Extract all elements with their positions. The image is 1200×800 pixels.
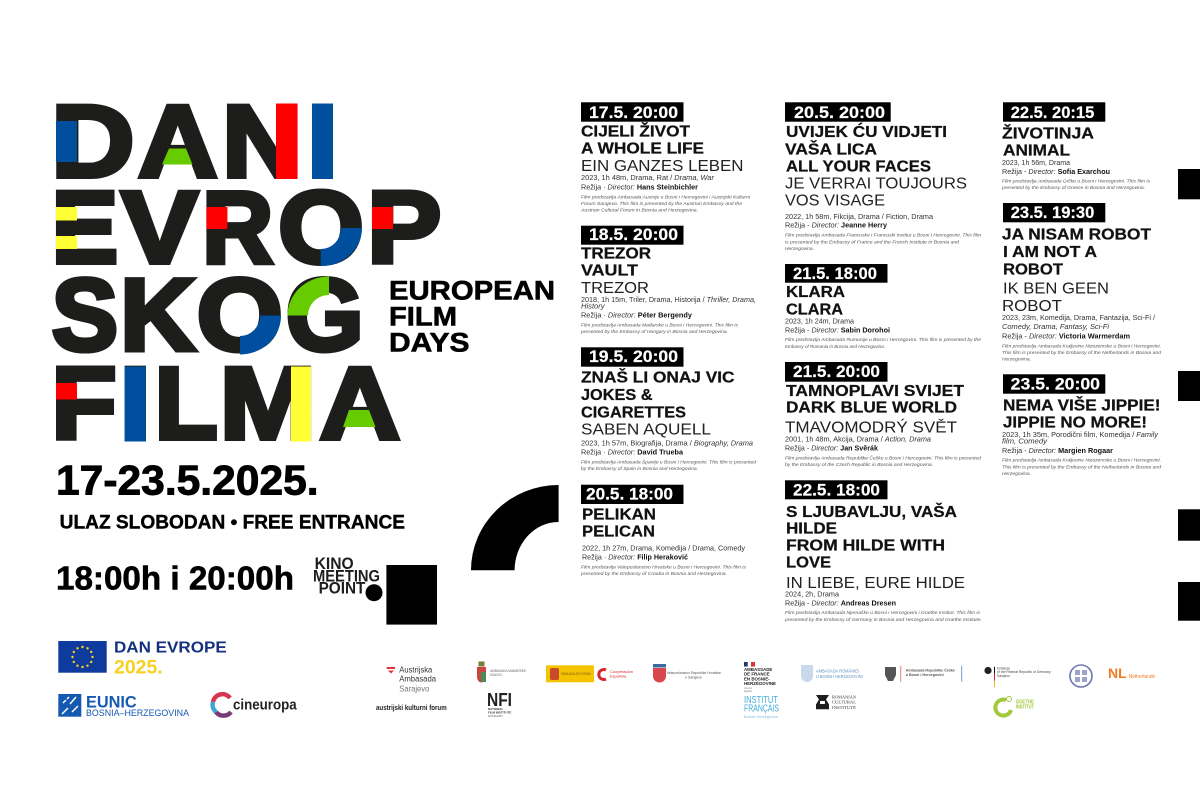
panel: film 23.5. Nema više Jippie: 23.5. 20:00	[1011, 374, 1100, 393]
panel: film 19.5. Znaš li onaj vic: CIGARETTES	[581, 404, 686, 421]
logo: Embassy of Romania: U BOSNI I HERCEGOVINI	[816, 674, 863, 679]
panel: film 17.5. Cijeli život: Forum Sarajevo. This film is presented by the Austrian Embassy and the	[581, 201, 742, 207]
panel: film 17.5. Cijeli život: Režija · Director: Hans Steinbichler	[581, 182, 698, 191]
panel: film 20.5. Pelikan: 2022, 1h 27m, Drama, Komedija / Drama, Comedy	[582, 544, 745, 553]
panel: film 23.5. Ja nisam robot: Comedy, Drama, Fantasy, Sci-Fi	[1002, 322, 1109, 331]
panel: film 21.5. Tamnoplavi svijet: Film predstavlja Ambasada Republike Češke u Bosni i Hercegovini. This film is presented	[785, 455, 981, 462]
panel: film 20.5. Pelikan: 20.5. 18:00	[586, 484, 673, 503]
panel: film 22.5. S ljubavlju, vaša Hilde: HILDE	[786, 521, 837, 538]
panel: film 20.5. Uvijek ću vidjeti vaša lica: Film predstavlja Ambasada Francuske i Francuski Institut u Bosni i Hercegovini. This film	[785, 233, 981, 239]
panel: film 19.5. Znaš li onaj vic: SABEN AQUELL	[581, 422, 711, 439]
logo: Cineuropa: cineuropa	[233, 696, 297, 713]
panel: film 22.5. S ljubavlju, vaša Hilde: FROM HILDE WITH	[786, 538, 945, 555]
logo: Embassy of Croatia: u Sarajevu	[685, 674, 702, 680]
panel: film 19.5. Znaš li onaj vic: JOKES &	[581, 387, 652, 404]
panel: film 22.5. Životinja: Režija - Director: Sofia Exarchou	[1002, 167, 1110, 176]
panel: film 22.5. S ljubavlju, vaša Hilde: 22.5. 18:00	[793, 480, 880, 499]
panel: film 18.5. Trezor: Režija · Director: Péter Bergendy	[581, 311, 693, 320]
panel: film 23.5. Nema više Jippie: JIPPIE NO MORE!	[1003, 415, 1147, 432]
logo: Embassy of Hungary: AMBASADA MAĐARSKE	[490, 669, 527, 673]
panel: film 18.5. Trezor: presented by the Embassy of Hungary in Bosnia and Herzegovina.	[580, 329, 728, 335]
panel: film 23.5. Nema više Jippie: Režija - Director: Margien Rogaar	[1002, 446, 1113, 455]
title: Dani evropskog filma: N	[222, 85, 302, 198]
decorative black quarter arc	[471, 485, 559, 570]
film strip squares on right edge	[1178, 169, 1200, 621]
panel: film 22.5. S ljubavlju, vaša Hilde	[784, 480, 982, 623]
logo: Embassy of Romania: AMBASADA ROMÂNIEI	[816, 669, 859, 674]
panel: film 23.5. Ja nisam robot: Film predstavlja Ambasada Kraljevine Nizozemske u Bosni i Hercegovini.	[1002, 343, 1161, 349]
panel: film 23.5. Nema više Jippie: NEMA VIŠE JIPPIE!	[1003, 397, 1160, 415]
title: Dani evropskog filma: K	[120, 258, 196, 372]
subtitle: European Film Days: DAYS	[389, 328, 470, 358]
panel: film 20.5. Uvijek ću vidjeti vaša lica: 2022, 1h 58m, Fikcija, Drama / Fiction, Drama	[785, 212, 934, 221]
panel: film 23.5. Ja nisam robot: This film is presented by the Embassy of the Netherlands in Bosnia and	[1002, 350, 1161, 356]
panel: film 22.5. S ljubavlju, vaša Hilde: LOVE	[786, 555, 831, 572]
panel: film 23.5. Ja nisam robot	[1002, 203, 1161, 363]
panel: film 21.5. Klara	[785, 264, 981, 350]
logo: Cooperación Española: Cooperación	[610, 669, 633, 674]
logo: Embassy of Croatia: Veleposlanstvo Republike Hrvatske	[667, 670, 722, 675]
panel: film 23.5. Nema više Jippie: This film is presented by the Embassy of the Netherlands in Bosnia and	[1002, 464, 1161, 470]
title: Dani evropskog filma	[51, 85, 441, 461]
title: Dani evropskog filma: G	[286, 259, 364, 372]
logo: Cooperación Española	[599, 669, 633, 680]
logo: National Film Institute Hungary: FILM INSTITUTE	[488, 710, 511, 714]
logo: Embassy of France: Égalité	[744, 688, 752, 693]
logo: Embassy of France: DE FRANCE	[744, 672, 770, 677]
free entrance notice: ULAZ SLOBODAN • FREE ENTRANCE	[60, 513, 405, 534]
panel: film 23.5. Ja nisam robot: Režija - Director: Victoria Warmerdam	[1002, 331, 1130, 340]
panel: film 17.5. Cijeli život: Film predstavlja Ambasada Austrije u Bosni i Hercegovini i Austrijski Kulturni	[581, 194, 751, 200]
title: Dani evropskog filma: R	[202, 171, 273, 285]
decorative black square	[386, 565, 437, 625]
festival dates: 17-23.5.2025.	[56, 457, 319, 504]
panel: film 23.5. Ja nisam robot: ROBOT	[1003, 261, 1064, 278]
logo: Embassy of Germany	[984, 666, 1051, 687]
panel: film 23.5. Ja nisam robot: JA NISAM ROBOT	[1002, 227, 1152, 244]
logo: Austrian Embassy Sarajevo	[387, 666, 437, 693]
panel: film 23.5. Ja nisam robot: 23.5. 19:30	[1011, 203, 1094, 222]
logo: National Film Institute Hungary: NFI	[487, 690, 512, 710]
panel: film 20.5. Uvijek ću vidjeti vaša lica: ALL YOUR FACES	[786, 158, 931, 175]
panel: film 20.5. Uvijek ću vidjeti vaša lica: VOS VISAGE	[785, 193, 885, 210]
logo: Embassy of Germany: Embassy	[997, 666, 1010, 670]
logo: Romanian Cultural Institute: INSTITUTE	[832, 705, 856, 710]
panel: film 17.5. Cijeli život: Austrian Cultural Forum in Bosnia and Herzegovina.	[580, 208, 698, 214]
panel: film 20.5. Uvijek ću vidjeti vaša lica: 20.5. 20:00	[794, 103, 885, 122]
logo: Embassy of France: Liberté	[744, 686, 752, 690]
panel: film 18.5. Trezor: 2018, 1h 15m, Triler, Drama, Historija / Thriller, Drama,	[581, 295, 756, 304]
logo: Embassy of the Czech Republic	[885, 666, 962, 682]
panel: film 18.5. Trezor: TREZOR	[581, 280, 649, 297]
panel: film 23.5. Ja nisam robot: ROBOT	[1002, 298, 1063, 315]
panel: film 21.5. Klara: Režija - Director: Sabin Dorohoi	[785, 326, 890, 335]
logo: Goethe Institut: GOETHE	[1016, 699, 1035, 705]
panel: film 21.5. Tamnoplavi svijet: TAMNOPLAVI SVIJET	[786, 383, 965, 400]
logo: Kino Meeting Point: POINT	[319, 579, 366, 598]
panel: film 22.5. S ljubavlju, vaša Hilde: IN LIEBE, EURE HILDE	[786, 575, 965, 592]
logo: EUNIC Bosnia-Herzegovina	[58, 693, 190, 719]
panel: film 17.5. Cijeli život: A WHOLE LIFE	[581, 141, 704, 158]
panel: film 18.5. Trezor: TREZOR	[581, 245, 651, 262]
panel: film 20.5. Pelikan: Film predstavlja Veleposlanstvo Hrvatske u Bosni i Hercegovini. This film is	[581, 564, 747, 570]
title: Dani evropskog filma: D	[51, 85, 134, 198]
logo: EUNIC Bosnia-Herzegovina: BOSNIA–HERZEGOVINA	[86, 708, 190, 719]
logo: Austrian Cultural Forum: austrijski kulturni forum	[376, 705, 447, 712]
logo: NL Netherlands: NL	[1108, 665, 1127, 681]
panel: film 22.5. S ljubavlju, vaša Hilde: S LJUBAVLJU, VAŠA	[786, 503, 957, 521]
logo: Cineuropa	[213, 694, 297, 716]
title: Dani evropskog filma: O	[197, 258, 283, 372]
logo: Embassy of Germany: of the Federal Republic of Germany	[997, 670, 1051, 674]
logo: EUNIC Bosnia-Herzegovina: EUNIC	[86, 693, 137, 712]
panel: film 19.5. Znaš li onaj vic: ZNAŠ LI ONAJ VIC	[581, 369, 734, 387]
title: Dani evropskog filma: A	[138, 85, 217, 199]
logo: Austrian Embassy Sarajevo: Ambasada	[399, 675, 437, 684]
panel: film 20.5. Uvijek ću vidjeti vaša lica: Herzegovina.	[785, 246, 814, 252]
panel: film 17.5. Cijeli život	[580, 102, 751, 214]
panel: film 20.5. Pelikan	[580, 484, 747, 577]
title: Dani evropskog filma: F	[52, 348, 116, 461]
panel: film 23.5. Nema više Jippie: Film predstavlja Ambasada Kraljevine Nizozemske u Bosni i Hercegovini.	[1002, 458, 1161, 464]
logo: Cooperación Española: Española	[610, 674, 627, 678]
panel: film 22.5. Životinja: 2023, 1h 56m, Drama	[1002, 158, 1071, 167]
panel: film 23.5. Ja nisam robot: Herzegovina.	[1002, 357, 1031, 363]
logo: Embassy of France	[744, 662, 776, 693]
panel: film 22.5. Životinja: ANIMAL	[1003, 143, 1070, 160]
panel: film 19.5. Znaš li onaj vic	[581, 347, 756, 472]
panel: film 22.5. S ljubavlju, vaša Hilde: presented by the Embassy of Germany in Bosnia and Herzegovina and Goethe Institute.	[784, 617, 982, 623]
logo: Embassy of Romania	[801, 665, 863, 682]
panel: film 19.5. Znaš li onaj vic: 19.5. 20:00	[589, 347, 678, 366]
panel: film 19.5. Znaš li onaj vic: 2023, 1h 57m, Biografija, Drama / Biography, Drama	[581, 439, 753, 448]
panel: film 23.5. Nema više Jippie	[1002, 374, 1161, 477]
panel: film 19.5. Znaš li onaj vic: by the Embassy of Spain in Bosnia and Herzegovina.	[581, 466, 698, 472]
logo: Romanian Cultural Institute: CULTURAL	[832, 700, 856, 705]
panel: film 23.5. Nema više Jippie: film, Comedy	[1002, 437, 1048, 446]
title: Dani evropskog filma: M	[220, 347, 316, 461]
logo: National Film Institute Hungary	[487, 690, 512, 718]
panel: film 21.5. Klara: 2023, 1h 24m, Drama	[785, 317, 855, 326]
logo: Embassy of Hungary: SARAJEVO	[490, 673, 502, 677]
logo: National Film Institute Hungary: NATIONAL	[488, 707, 503, 711]
subtitle: European Film Days	[389, 276, 555, 358]
panel: film 19.5. Znaš li onaj vic: Film predstavlja Ambasada Španije u Bosni i Hercegovini. This film is presented	[581, 458, 756, 465]
logo: Kino Meeting Point	[313, 554, 382, 601]
logo: Institut français	[744, 695, 779, 719]
panel: film 20.5. Uvijek ću vidjeti vaša lica: VAŠA LICA	[785, 140, 877, 158]
panel: film 22.5. S ljubavlju, vaša Hilde: 2024, 2h, Drama	[785, 590, 840, 599]
logo: Goethe Institut: INSTITUT	[1016, 705, 1034, 711]
panel: film 21.5. Klara: KLARA	[786, 284, 845, 301]
panel: film 22.5. Životinja: Film predstavlja Ambasada Grčke u Bosni i Hercegovini. This film is	[1002, 179, 1151, 185]
title: Dani evropskog filma: O	[278, 171, 364, 285]
logo: Austrian Embassy Sarajevo: Sarajevo	[399, 684, 430, 693]
panel: film 20.5. Pelikan: presented by the Embassy of Croatia in Bosnia and Herzegovina.	[580, 571, 727, 577]
logo: Institut français: Bosnie-Herzégovine	[744, 714, 779, 719]
logo: Embassy of Hungary	[477, 662, 527, 682]
panel: film 21.5. Tamnoplavi svijet: by the Embassy of the Czech Republic in Bosnia and Herzegovina.	[785, 462, 933, 468]
logo: Embassy of France: EN BOSNIE-	[744, 676, 770, 681]
logo: Embassy of Spain: EMBAJADA DE ESPAÑA	[561, 671, 592, 676]
title: Dani evropskog filma: A	[320, 347, 400, 460]
panel: film 21.5. Tamnoplavi svijet	[785, 362, 981, 468]
panel: film 21.5. Klara: Embassy of Romania in Bosnia and Herzegovina.	[785, 344, 885, 350]
panel: film 21.5. Klara: Film predstavlja Ambasada Rumunije u Bosni i Hercegovini. This film is presented by the	[785, 337, 981, 343]
title: Dani evropskog filma: S	[52, 259, 118, 372]
panel: film 21.5. Klara: 21.5. 18:00	[793, 264, 877, 283]
logo: Institut français: INSTITUT	[744, 695, 778, 706]
logo: National Film Institute Hungary: HUNGARY	[488, 714, 503, 718]
panel: film 22.5. Životinja	[1001, 102, 1151, 191]
logo: Austrian Embassy Sarajevo: Austrijska	[399, 666, 433, 675]
logo: NL Netherlands: Netherlands	[1129, 674, 1155, 680]
logo: Embassy of the Czech Republic: Ambasada Republike Češke	[906, 668, 955, 673]
logo: Embassy of Spain	[546, 665, 594, 682]
panel: film 23.5. Nema više Jippie: Herzegovina.	[1002, 471, 1031, 477]
panel: film 19.5. Znaš li onaj vic: Režija · Director: David Trueba	[581, 448, 684, 457]
panel: film 17.5. Cijeli život: 17.5. 20:00	[589, 103, 678, 122]
logo: Goethe Institut	[995, 696, 1035, 716]
subtitle: European Film Days: FILM	[389, 302, 457, 332]
logo: Dan Evrope 2025	[58, 640, 227, 678]
panel: film 21.5. Tamnoplavi svijet: 2001, 1h 48m, Akcija, Drama / Action, Drama	[785, 435, 931, 444]
logo: Embassy of France: HERZÉGOVINE	[744, 681, 776, 686]
panel: film 20.5. Pelikan: Režija · Director: Filip Heraković	[582, 553, 688, 562]
panel: film 23.5. Nema više Jippie: 2023, 1h 35m, Porodični film, Komedija / Family	[1002, 430, 1159, 439]
title: Dani evropskog filma: P	[367, 171, 441, 284]
panel: film 20.5. Pelikan: PELIKAN	[582, 506, 656, 523]
logo: Embassy of Croatia	[653, 664, 722, 683]
title: Dani evropskog filma: V	[121, 171, 198, 284]
logo: Kino Meeting Point: MEETING	[313, 566, 380, 586]
panel: film 20.5. Uvijek ću vidjeti vaša lica: UVIJEK ĆU VIDJETI	[786, 123, 947, 141]
logo: Dan Evrope 2025: DAN EVROPE	[114, 640, 227, 657]
logo: Institut français: FRANÇAIS	[744, 704, 779, 715]
panel: film 20.5. Pelikan: PELICAN	[582, 524, 655, 541]
panel: film 17.5. Cijeli život: CIJELI ŽIVOT	[581, 122, 691, 140]
title: Dani evropskog filma: L	[155, 346, 218, 460]
panel: film 21.5. Tamnoplavi svijet: DARK BLUE WORLD	[786, 400, 957, 417]
title: Dani evropskog filma: E	[52, 171, 118, 285]
panel: film 22.5. S ljubavlju, vaša Hilde: Film predstavlja Ambasada Njemačke u Bosni i Hercegovini i Goethe Institut. This film is	[785, 610, 981, 616]
logo: Kino Meeting Point: KINO	[315, 554, 354, 573]
panel: film 20.5. Uvijek ću vidjeti vaša lica: JE VERRAI TOUJOURS	[785, 175, 967, 192]
logo: NL Netherlands	[1108, 665, 1155, 681]
logo: Dan Evrope 2025: 2025.	[114, 657, 163, 678]
panel: film 18.5. Trezor: Film predstavlja Ambasada Mađarske u Bosni i Hercegovini. This film is	[581, 322, 739, 328]
logo: Embassy of Greece	[1070, 665, 1092, 687]
panel: film 21.5. Tamnoplavi svijet: TMAVOMODRÝ SVĚT	[785, 420, 958, 437]
subtitle: European Film Days: EUROPEAN	[389, 276, 555, 306]
panel: film 22.5. S ljubavlju, vaša Hilde: Režija - Director: Andreas Dresen	[785, 599, 896, 608]
panel: film 18.5. Trezor	[580, 225, 756, 335]
panel: film 20.5. Uvijek ću vidjeti vaša lica: Režija - Director: Jeanne Herry	[785, 221, 888, 230]
panel: film 18.5. Trezor: VAULT	[581, 263, 639, 280]
logo: Romanian Cultural Institute: ROMANIAN	[832, 694, 857, 699]
panel: film 21.5. Tamnoplavi svijet: 21.5. 20:00	[793, 362, 880, 381]
logo: Romanian Cultural Institute	[816, 694, 857, 710]
panel: film 17.5. Cijeli život: 2023, 1h 48m, Drama, Rat / Drama, War	[581, 173, 714, 182]
panel: film 21.5. Tamnoplavi svijet: Režija - Director: Jan Svěrák	[785, 444, 879, 453]
panel: film 22.5. Životinja: 22.5. 20:15	[1011, 103, 1094, 122]
panel: film 18.5. Trezor: 18.5. 20:00	[589, 225, 678, 244]
panel: film 18.5. Trezor: History	[581, 302, 606, 311]
panel: film 23.5. Ja nisam robot: I AM NOT A	[1003, 244, 1097, 261]
title: Dani evropskog filma: I	[120, 347, 151, 461]
panel: film 20.5. Uvijek ću vidjeti vaša lica	[785, 102, 981, 252]
panel: film 22.5. Životinja: ŽIVOTINJA	[1002, 124, 1094, 142]
panel: film 21.5. Klara: CLARA	[786, 301, 843, 318]
logo: Embassy of Germany: Sarajevo	[997, 674, 1010, 678]
panel: film 23.5. Ja nisam robot: 2023, 23m, Komedija, Drama, Fantazija, Sci-Fi /	[1002, 313, 1156, 322]
panel: film 20.5. Uvijek ću vidjeti vaša lica: is presented by the Embassy of France and the French Institute in Bosnia and	[785, 240, 959, 246]
screening times: 18:00h i 20:00h	[56, 560, 294, 597]
logo: Embassy of the Czech Republic: u Bosni i Hercegovini	[906, 673, 944, 677]
panel: film 17.5. Cijeli život: EIN GANZES LEBEN	[581, 158, 744, 175]
logo: Embassy of France: AMBASSADE	[744, 667, 772, 672]
panel: film 23.5. Ja nisam robot: IK BEN GEEN	[1003, 280, 1109, 297]
panel: film 22.5. Životinja: presented by the Embassy of Greece in Bosnia and Herzegovina.	[1001, 185, 1145, 191]
title: Dani evropskog filma: I	[307, 86, 338, 199]
